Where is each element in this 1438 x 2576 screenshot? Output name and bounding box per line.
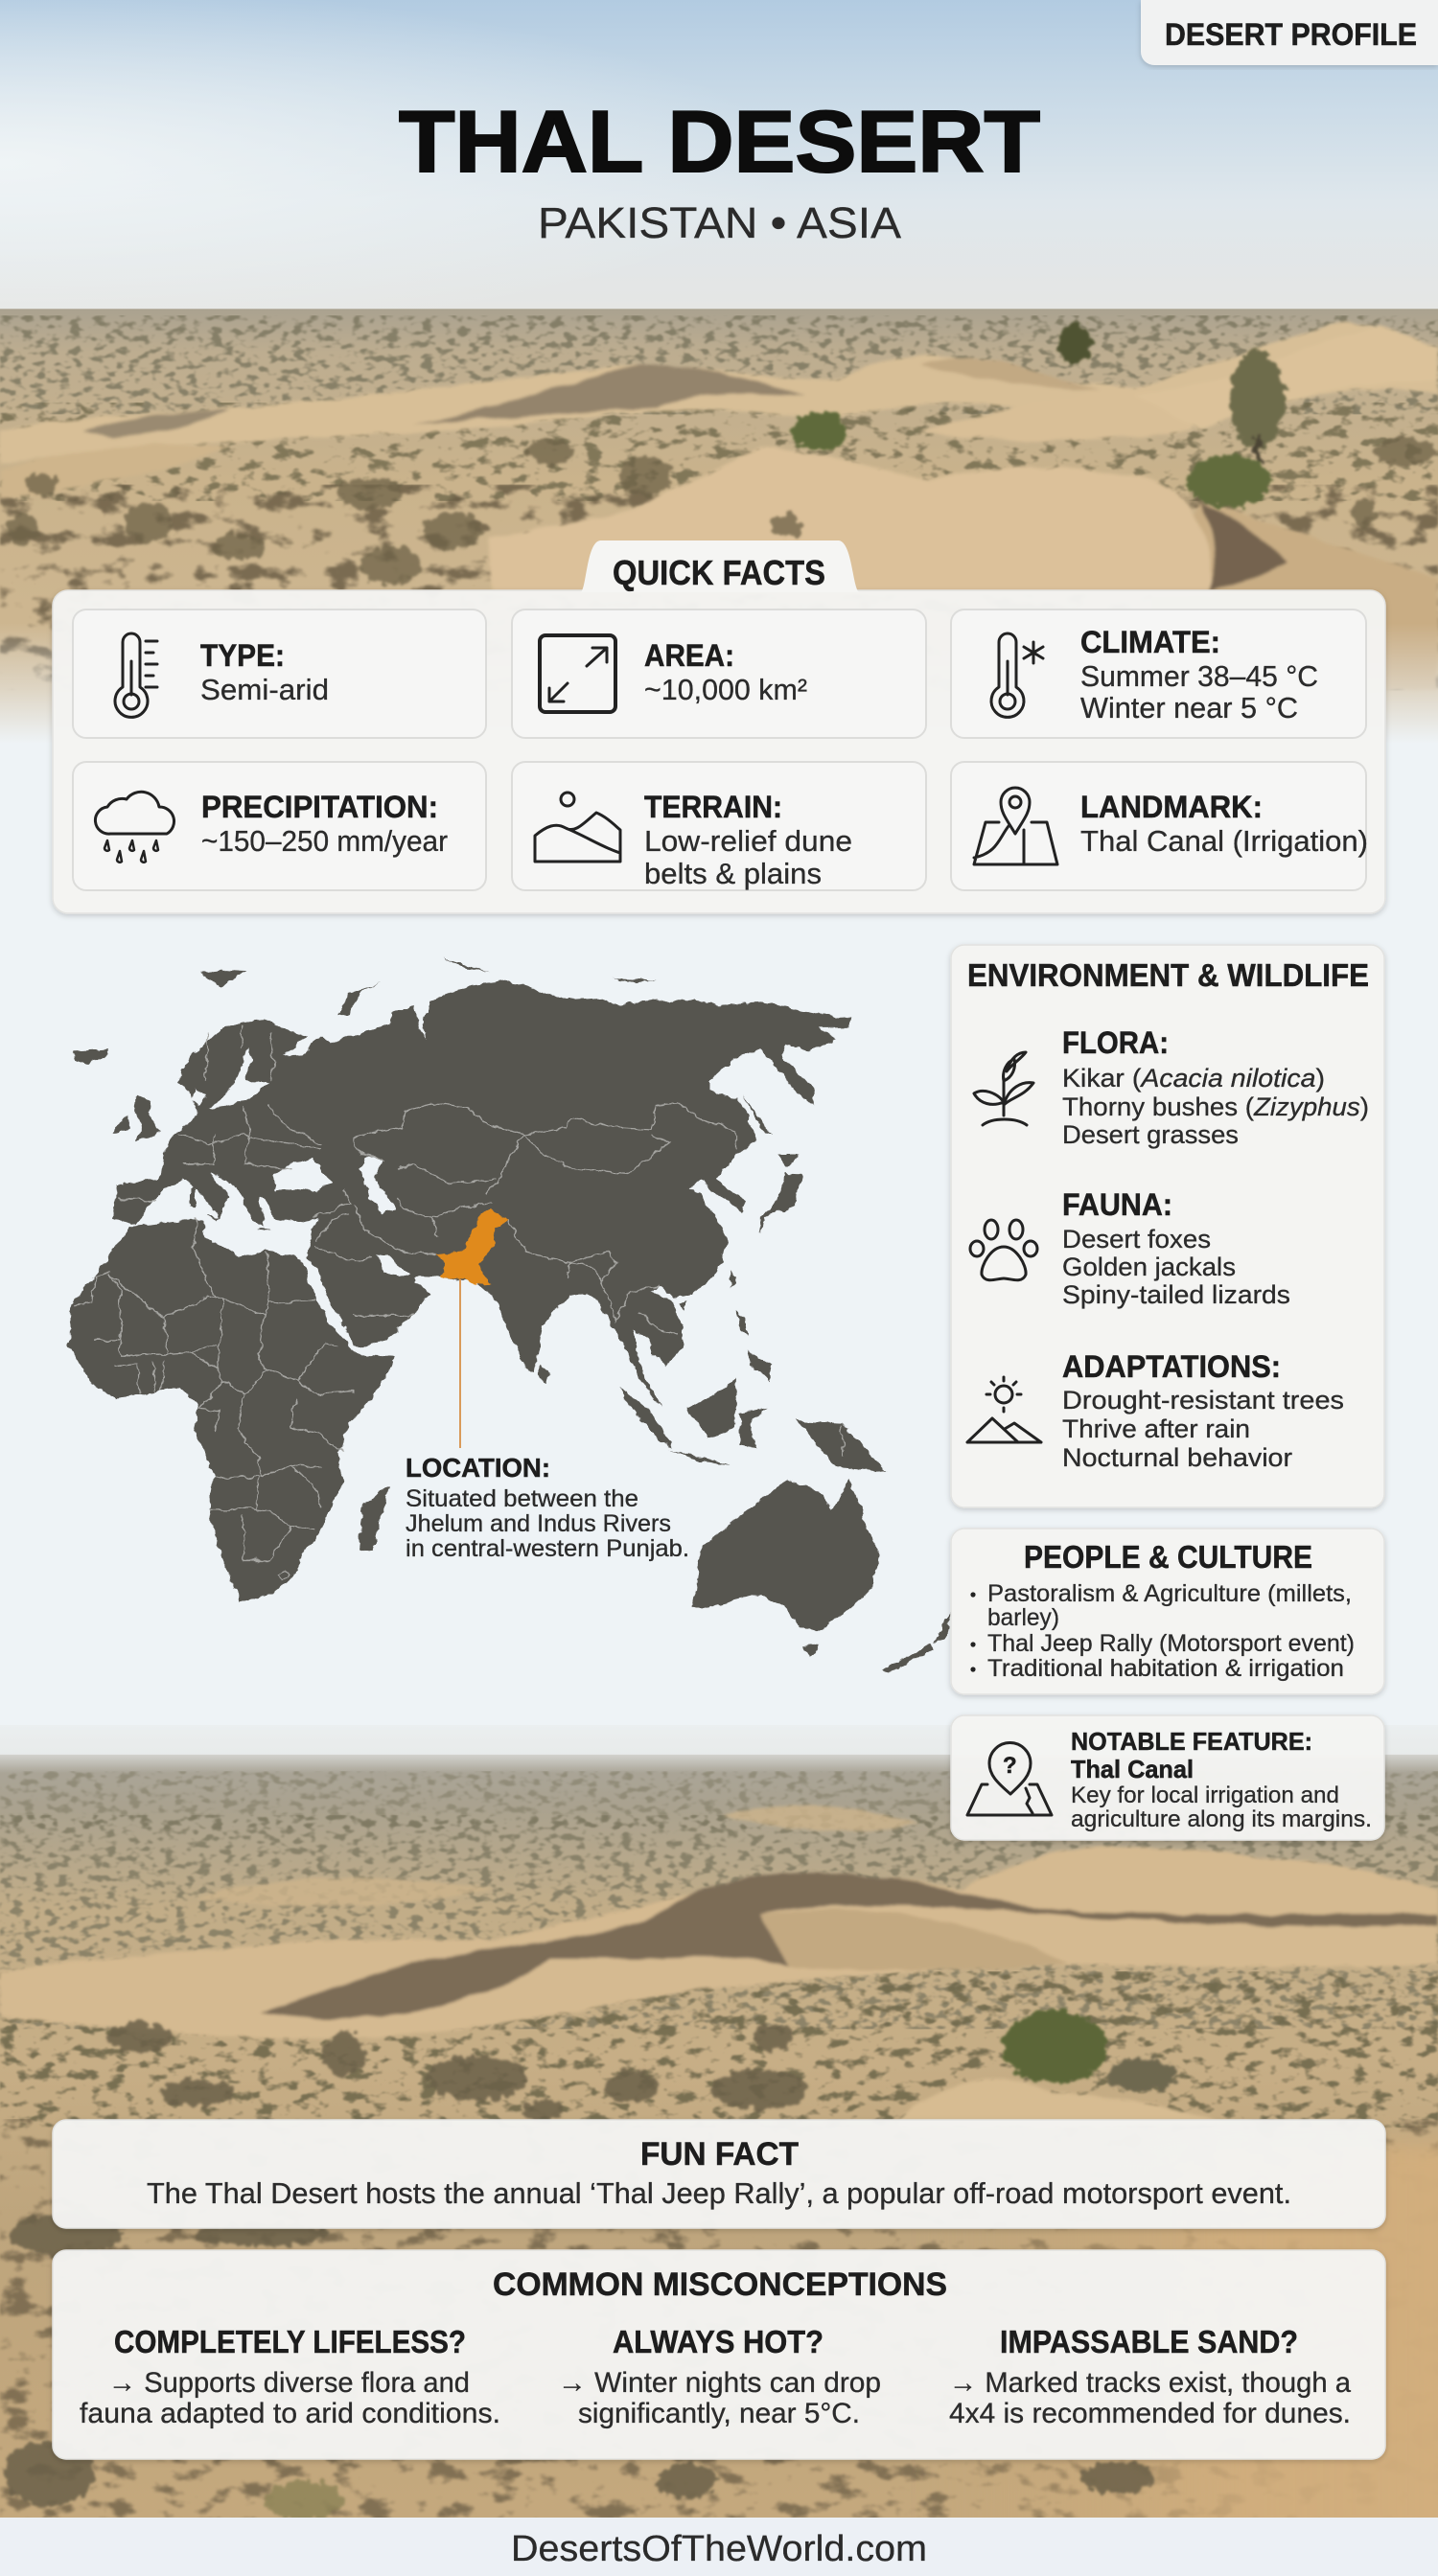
- background: pale middle: [0, 316, 1438, 1782]
- bullet list: Pastoralism & Agriculture (millets,: [987, 1580, 1352, 1607]
- bullet list: barley): [987, 1604, 1059, 1631]
- tag: desert profile: [1141, 0, 1438, 65]
- footer bar: [0, 2518, 1438, 2576]
- chart: world map: [69, 958, 951, 1672]
- heading: quick facts: QUICK FACTS: [613, 553, 825, 592]
- card: type: TYPE:: [200, 638, 285, 673]
- misconception: lifeless: fauna adapted to arid conditions.: [80, 2398, 500, 2429]
- misconception: always hot: [558, 2324, 881, 2429]
- title: THAL DESERT: [399, 94, 1040, 191]
- notable feature text: [1071, 1727, 1372, 1832]
- adaptations block: Thrive after rain: [1062, 1414, 1250, 1443]
- bullet list: [970, 1580, 1355, 1682]
- card: precipitation: [73, 762, 486, 890]
- map land: eurasia: [112, 980, 851, 1406]
- icon: map pin with question mark: [967, 1742, 1052, 1815]
- notable feature text: Thal Canal: [1071, 1755, 1194, 1783]
- panel: common misconceptions: [53, 2250, 1385, 2459]
- heading: environment and wildlife: ENVIRONMENT & WILDLIFE: [967, 957, 1369, 993]
- flora block: Thorny bushes (Zizyphus): [1062, 1092, 1369, 1121]
- heading: people and culture: PEOPLE & CULTURE: [1024, 1539, 1312, 1575]
- fauna block: FAUNA:: [1062, 1187, 1172, 1222]
- adaptations block: Drought-resistant trees: [1062, 1386, 1344, 1414]
- photo: lower desert landscape: [0, 1755, 1438, 2539]
- map islands: [73, 958, 951, 1672]
- card: area: ~10,000 km²: [644, 673, 807, 706]
- location callout: LOCATION:: [406, 1453, 550, 1483]
- flora block: [974, 1025, 1369, 1149]
- misconception: lifeless: [80, 2324, 500, 2429]
- card: terrain: belts & plains: [644, 857, 822, 890]
- map borders: [74, 1024, 844, 1579]
- misconception: impassable sand: 4x4 is recommended for dunes.: [949, 2398, 1351, 2429]
- photo: horizon haze: [0, 1725, 1438, 1773]
- heading: fun fact: FUN FACT: [640, 2136, 799, 2173]
- misconception: always hot: significantly, near 5°C.: [578, 2398, 860, 2429]
- tag: desert profile: DESERT PROFILE: [1165, 17, 1417, 52]
- flora block: FLORA:: [1062, 1025, 1169, 1060]
- panel: fun fact: [53, 2120, 1385, 2228]
- card: terrain: TERRAIN:: [644, 790, 782, 824]
- location callout: Jhelum and Indus Rivers: [406, 1510, 671, 1537]
- card: precipitation: PRECIPITATION:: [201, 790, 438, 824]
- card: climate: Summer 38–45 °C: [1080, 659, 1318, 693]
- misconception: impassable sand: [949, 2324, 1351, 2429]
- card: climate: [951, 610, 1366, 738]
- card: type: [73, 610, 486, 738]
- fauna block: [970, 1187, 1290, 1309]
- panel: notable feature: [951, 1715, 1384, 1840]
- panel: quick facts: [53, 540, 1385, 913]
- icon: map pin with question mark: ?: [1003, 1753, 1017, 1779]
- card: type: Semi-arid: [200, 673, 329, 706]
- map land: africa: [69, 1220, 396, 1601]
- heading: common misconceptions: COMMON MISCONCEPTIONS: [493, 2266, 947, 2303]
- footer bar: DesertsOfTheWorld.com: [511, 2529, 927, 2569]
- adaptations block: [967, 1349, 1344, 1472]
- map seas: [192, 1047, 395, 1213]
- location pointer line: [459, 1279, 461, 1448]
- location callout: [406, 1453, 689, 1562]
- card: area: [512, 610, 926, 738]
- photo: fade into pale background: [0, 623, 1438, 744]
- fauna block: Spiny-tailed lizards: [1062, 1280, 1290, 1309]
- card: landmark: [951, 762, 1368, 890]
- misconception: always hot: → Winter nights can drop: [558, 2367, 881, 2399]
- adaptations block: ADAPTATIONS:: [1062, 1349, 1281, 1384]
- adaptations block: Nocturnal behavior: [1062, 1443, 1292, 1472]
- notable feature text: NOTABLE FEATURE:: [1071, 1727, 1312, 1756]
- card: climate: Winter near 5 °C: [1080, 691, 1298, 724]
- card: area: AREA:: [644, 638, 734, 673]
- flora block: Desert grasses: [1062, 1120, 1239, 1149]
- subtitle: PAKISTAN • ASIA: [538, 198, 901, 247]
- card: climate: CLIMATE:: [1080, 625, 1220, 659]
- location callout: Situated between the: [406, 1485, 638, 1512]
- panel: people and culture: [951, 1529, 1384, 1694]
- card: terrain: Low-relief dune: [644, 824, 852, 858]
- fauna block: Golden jackals: [1062, 1253, 1236, 1281]
- photo: upper desert landscape: [0, 309, 1438, 743]
- bullet list: Thal Jeep Rally (Motorsport event): [987, 1630, 1355, 1657]
- misconception: lifeless: COMPLETELY LIFELESS?: [114, 2324, 466, 2359]
- fun fact text: The Thal Desert hosts the annual ‘Thal Jeep Rally’, a popular off-road motorsport event.: [147, 2176, 1291, 2210]
- flora block: Kikar (Acacia nilotica ): [1062, 1064, 1325, 1092]
- card: terrain: [512, 762, 926, 890]
- notable feature text: agriculture along its margins.: [1071, 1806, 1372, 1832]
- map highlight: pakistan: [435, 1209, 508, 1285]
- bullet list: Traditional habitation & irrigation: [987, 1655, 1344, 1682]
- fauna block: Desert foxes: [1062, 1225, 1211, 1254]
- misconception: impassable sand: → Marked tracks exist, though a: [949, 2367, 1351, 2399]
- card: landmark: Thal Canal (Irrigation): [1080, 824, 1368, 858]
- misconception: lifeless: → Supports diverse flora and: [108, 2367, 470, 2399]
- card: landmark: LANDMARK:: [1080, 790, 1263, 824]
- location callout: in central-western Punjab.: [406, 1535, 689, 1562]
- panel: environment and wildlife: [951, 945, 1384, 1507]
- card: precipitation: ~150–250 mm/year: [201, 824, 448, 858]
- notable feature text: Key for local irrigation and: [1071, 1782, 1339, 1808]
- misconception: impassable sand: IMPASSABLE SAND?: [1000, 2324, 1298, 2359]
- misconception: always hot: ALWAYS HOT?: [613, 2324, 823, 2359]
- background: sky: [0, 0, 1438, 326]
